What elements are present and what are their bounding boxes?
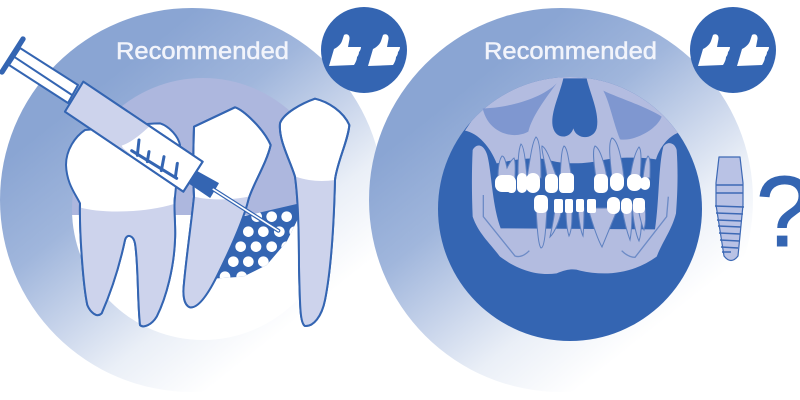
panel: bone graft injection <box>0 8 384 392</box>
tooth: molar <box>66 123 180 326</box>
needle hub <box>189 172 218 197</box>
thumb one <box>329 34 361 66</box>
dark x-ray circle <box>438 77 702 341</box>
skull upper face <box>465 75 678 163</box>
mandibular canals <box>483 195 668 257</box>
syringe <box>2 39 278 231</box>
mandible <box>472 143 678 274</box>
background gradient circle left <box>0 8 384 392</box>
barrel <box>65 82 203 192</box>
background gradient circle right <box>369 8 753 392</box>
heading: Recommended: Recommended <box>484 38 657 65</box>
plunger cap <box>2 39 23 72</box>
thumb one <box>698 34 730 66</box>
upper tooth roots <box>498 137 650 178</box>
icon: double thumbs up right <box>690 7 776 93</box>
plunger rods <box>9 48 78 103</box>
tooth: middle premolar <box>183 107 271 307</box>
implant icon <box>715 157 744 260</box>
tooth: right premolar <box>280 99 349 326</box>
nasal cavity <box>552 78 597 137</box>
thumb two <box>737 34 769 66</box>
icon: double thumbs up left <box>321 7 407 93</box>
panel: panoramic x-ray <box>369 8 753 392</box>
needle <box>213 189 278 231</box>
lower tooth crowns <box>534 195 645 214</box>
lower tooth roots <box>536 204 646 248</box>
right sinus <box>603 91 662 140</box>
upper tooth crowns <box>495 173 650 193</box>
left sinus <box>483 83 557 135</box>
scale ticks <box>132 140 177 178</box>
inner circle: gum and bone <box>72 78 298 340</box>
heading: Recommended: Recommended <box>116 38 289 65</box>
thumb two <box>368 34 400 66</box>
bone graft dotted area <box>217 204 298 278</box>
